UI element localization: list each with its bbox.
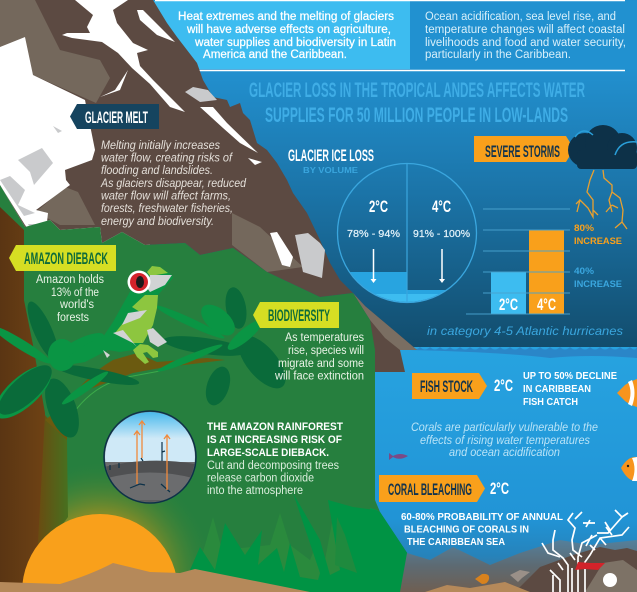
grass shade xyxy=(335,517,357,573)
tan rock lower right xyxy=(232,213,303,272)
text: amazon holds: forests xyxy=(57,312,89,324)
icon: storm cloud xyxy=(568,125,637,169)
label 40 percent: 40% xyxy=(574,266,595,277)
label 4 degrees xyxy=(413,197,470,240)
tree trunk shade xyxy=(37,415,68,560)
label 4 degrees: 4°C xyxy=(432,197,451,216)
arrows down xyxy=(374,249,442,280)
text: amazon rainforest risk: THE AMAZON RAINFOREST xyxy=(207,421,343,433)
icon: bleached coral xyxy=(542,510,629,592)
text: corals vulnerable: and ocean acidification xyxy=(449,447,560,459)
sun glow xyxy=(0,450,240,592)
bar chart: hurricanes xyxy=(466,209,622,314)
text: amazon rainforest risk xyxy=(207,421,343,497)
text: biodiversity description: rise, species will xyxy=(288,345,364,357)
grass dark xyxy=(190,513,380,592)
frog pale markings xyxy=(103,275,172,358)
label: amazon dieback: AMAZON DIEBACK xyxy=(24,250,108,268)
icon: small orange fish xyxy=(475,574,489,584)
bar chart: hurricanes: 4°C xyxy=(537,295,556,314)
mountain xyxy=(0,0,417,372)
text: heat extremes xyxy=(178,11,396,61)
sky background xyxy=(150,0,637,350)
text: corals vulnerable: Corals are particularly vulnerable to the xyxy=(411,422,598,434)
label 2 degrees: 2°C xyxy=(369,197,388,216)
label 80 percent: INCREASE xyxy=(574,236,622,247)
label: biodiversity: BIODIVERSITY xyxy=(268,307,330,325)
leaves left xyxy=(0,298,140,442)
snow ridges xyxy=(62,0,293,267)
icon: clownfish upper xyxy=(617,379,637,407)
green hillside xyxy=(0,185,433,592)
bright green strip xyxy=(370,508,420,592)
label: severe storms xyxy=(474,136,574,162)
gray rock patches xyxy=(0,126,62,235)
label 2 degrees xyxy=(347,197,400,240)
text: coral bleaching probability: BLEACHING OF CORALS IN xyxy=(404,524,529,536)
text: melting description: forests, freshwater fisheries, xyxy=(101,203,233,215)
text: coral bleaching probability xyxy=(401,512,563,548)
text: amazon holds: Amazon holds xyxy=(36,274,104,286)
heading: glacier ice loss xyxy=(288,147,374,175)
tan rock slope xyxy=(353,293,417,350)
text: amazon holds xyxy=(36,274,104,324)
text: fish decline: FISH CATCH xyxy=(523,397,578,408)
label: severe storms: SEVERE STORMS xyxy=(485,143,560,161)
text: coral bleaching probability: THE CARIBBEAN SEA xyxy=(407,537,505,548)
text: melting description: water flow will affect farms, xyxy=(101,190,231,202)
label 4 degrees: 91% - 100% xyxy=(413,229,470,240)
text: ocean acidification: particularly in the Caribbean. xyxy=(425,49,571,61)
label: coral bleaching: CORAL BLEACHING xyxy=(388,481,472,499)
sand foreground xyxy=(0,563,310,592)
text: heat extremes: America and the Caribbean. xyxy=(203,49,347,61)
text: amazon rainforest risk: LARGE-SCALE DIEBACK. xyxy=(207,447,329,459)
panel: top ocean acidification xyxy=(410,1,637,69)
text: fish decline: UP TO 50% DECLINE xyxy=(523,371,617,382)
text: melting description: energy and biodiversity. xyxy=(101,216,214,228)
label 80 percent xyxy=(574,223,622,247)
text: heat extremes: water supplies and biodiversity in Latin xyxy=(194,37,396,49)
leaves right xyxy=(154,286,294,408)
label: glacier melt: GLACIER MELT xyxy=(85,109,148,127)
panel: top heat extremes xyxy=(150,1,410,69)
label: fish stock: FISH STOCK xyxy=(420,378,473,396)
label: glacier melt xyxy=(70,104,159,129)
text: melting description: water flow, creating risks of xyxy=(101,152,234,164)
text: amazon holds: world's xyxy=(59,299,94,311)
icon: purple fish xyxy=(389,453,408,460)
text: heat extremes: will have adverse effects on agriculture, xyxy=(186,24,391,36)
divider lines xyxy=(155,0,625,70)
label: amazon dieback xyxy=(9,245,116,271)
grid lines xyxy=(466,209,570,314)
wave line xyxy=(410,347,637,358)
text: amazon holds: 13% of the xyxy=(51,287,99,299)
text: ocean acidification xyxy=(425,11,626,61)
frog foot xyxy=(133,344,158,364)
text: amazon rainforest risk: IS AT INCREASING RISK OF xyxy=(207,434,342,446)
text: melting description: As glaciers disappear, reduced xyxy=(100,178,247,190)
icon: gray coral xyxy=(510,570,530,582)
seabed xyxy=(400,540,637,592)
text: heat extremes: Heat extremes and the melting of glaciers xyxy=(178,11,394,23)
branch highlight xyxy=(72,371,160,415)
label: fish stock xyxy=(412,373,487,399)
grass bright xyxy=(190,493,433,592)
text: ocean acidification: Ocean acidification, sea level rise, and xyxy=(425,11,616,23)
heading: glacier ice loss: GLACIER ICE LOSS xyxy=(288,147,374,165)
sun xyxy=(22,514,178,592)
text: corals vulnerable xyxy=(411,422,598,459)
text: ocean acidification: temperature changes will affect coastal xyxy=(425,24,625,36)
text: melting description: Melting initially increases xyxy=(101,140,220,152)
frog belly xyxy=(115,295,158,343)
CO2 arrows xyxy=(134,421,170,490)
text: fish decline: IN CARIBBEAN xyxy=(523,384,591,395)
frog cap xyxy=(147,266,168,276)
bars xyxy=(491,272,526,314)
caption: hurricanes: in category 4-5 Atlantic hurricanes xyxy=(427,324,623,338)
text: amazon rainforest risk: release carbon dioxide xyxy=(207,472,314,484)
tree branch xyxy=(45,353,225,440)
text: ocean acidification: livelihoods and food and water security, xyxy=(425,37,626,49)
label 80 percent: 80% xyxy=(574,223,595,234)
snow field xyxy=(0,37,95,235)
label 40 percent xyxy=(574,266,622,290)
label: biodiversity xyxy=(253,302,339,328)
gray rocks on ridge xyxy=(185,87,325,278)
text: biodiversity description: As temperatures xyxy=(285,332,364,344)
tree trunk xyxy=(0,207,45,592)
frog xyxy=(67,266,173,365)
label: coral bleaching xyxy=(379,475,485,502)
icon: lightning xyxy=(576,170,627,229)
icon: red fish xyxy=(575,562,605,570)
chart: ice loss circle xyxy=(338,164,476,302)
text: biodiversity description: will face extinction xyxy=(274,370,364,382)
text: amazon rainforest risk: Cut and decomposing trees xyxy=(207,460,339,472)
frog body xyxy=(67,266,173,365)
text: melting description: flooding and landslides. xyxy=(101,165,213,177)
ocean background xyxy=(360,347,637,592)
text: fish decline xyxy=(523,371,617,408)
heading: glacier loss xyxy=(249,79,585,127)
label 40 percent: INCREASE xyxy=(574,279,622,290)
label 2 degrees: 78% - 94% xyxy=(347,229,400,240)
chart icon: deforestation circle xyxy=(103,410,197,504)
tan rock lower left xyxy=(36,187,95,225)
icon: clownfish lower xyxy=(621,457,637,481)
heading: glacier ice loss: BY VOLUME xyxy=(303,165,358,175)
text: coral 2 degrees: 2°C xyxy=(490,479,509,498)
bar labels: 2°C xyxy=(499,295,518,314)
icon: white sea urchin xyxy=(603,573,617,587)
tan rock upper left xyxy=(0,0,110,103)
frog eye xyxy=(128,270,150,294)
text: biodiversity description: migrate and some xyxy=(278,358,364,370)
text: melting description xyxy=(100,140,247,228)
text: amazon rainforest risk: into the atmosphere xyxy=(207,485,303,497)
text: biodiversity description xyxy=(274,332,364,382)
text: fish stock 2 degrees: 2°C xyxy=(494,376,513,395)
text: coral bleaching probability: 60-80% PROBABILITY OF ANNUAL xyxy=(401,512,563,523)
text: corals vulnerable: effects of rising water temperatures xyxy=(420,435,590,447)
